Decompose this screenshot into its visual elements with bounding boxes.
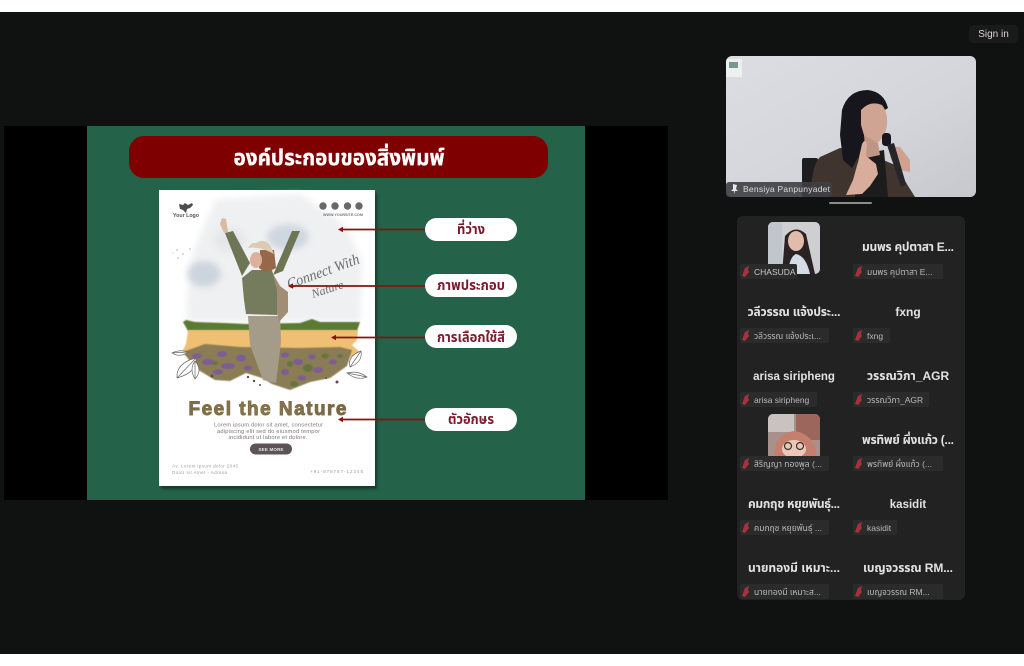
wall: [726, 56, 976, 197]
label: ที่ว่าง: [457, 219, 485, 237]
face: [861, 103, 888, 142]
participant: Manoporn: [853, 240, 954, 279]
label: [425, 408, 517, 431]
phone: +91-878787-12345: [310, 469, 363, 474]
participant: Manoporn: มนพร คุปตาสา E...: [862, 240, 954, 254]
poster example: [159, 190, 377, 489]
logo: [173, 203, 200, 219]
participant: kasidit: [853, 499, 926, 535]
hat: [248, 241, 274, 254]
hair: [840, 90, 888, 168]
participant: Pornthip: พรทิพย์ ผึ่งแก้ว (...: [862, 431, 954, 447]
raised hand: [846, 141, 878, 195]
participant: Nai Thongmee: นายทองมี เหมาะ...: [748, 561, 840, 575]
see more button: [250, 444, 292, 454]
poster headline: Feel the Nature: [188, 399, 346, 420]
social icons and website: [319, 202, 363, 217]
participant: Benyajawan: เบญจวรรณ RM...: [863, 561, 953, 575]
participant: kasidit: kasidit: [867, 523, 892, 533]
sign in button: Sign in: [978, 29, 1009, 40]
participant: Manoporn: มนพร คุปตาสา E...: [867, 267, 932, 277]
participant: fxng: [853, 305, 921, 343]
arrow: [331, 335, 426, 340]
participant: Nai Thongmee: [740, 561, 840, 599]
arrow: [338, 417, 426, 422]
participant: fxng: fxng: [895, 305, 921, 319]
participant: Wannipa AGR: วรรณวิภา_AGR: [867, 395, 923, 405]
participant: Khomkrit: [740, 497, 840, 535]
poster body text: adipiscing elit sed do eiusmod tempor: [217, 429, 320, 435]
participant: arisa siripheng: arisa siripheng: [753, 371, 835, 383]
script text: Connect With: [285, 252, 362, 293]
sky and clouds: [186, 194, 362, 322]
sign in button: [969, 25, 1018, 43]
label: [425, 274, 517, 297]
label: [425, 325, 517, 348]
neck: [864, 135, 880, 158]
sweater: [242, 270, 277, 315]
label: การเลือกใช้สี: [437, 329, 506, 345]
wheat field: [181, 330, 360, 360]
speaker name tag: Bensiya Panpunyadet: [743, 184, 831, 194]
slide title banner: [129, 136, 548, 178]
participant: CHASUDA: [740, 222, 820, 279]
poster body text: Lorem ipsum dolor sit amet, consectetur: [214, 422, 323, 428]
logo: Your Logo: [173, 213, 200, 219]
avatar: [768, 222, 820, 274]
participant: Benyajawan: เบญจวรรณ RM...: [867, 587, 930, 597]
social icons and website: WWW.YOURSITE.COM: [323, 213, 363, 217]
participant: arisa siripheng: [740, 371, 835, 407]
hand on microphone: [888, 146, 910, 172]
participant: Wannipa AGR: [853, 369, 949, 407]
label: ภาพประกอบ: [437, 277, 505, 293]
tree line: [183, 319, 360, 331]
address: Av. Lorem ipsum dolor 2045: [172, 464, 238, 468]
participant: Walaiwan: วลีวรรณ แจ้งประ...: [748, 305, 840, 319]
callout: colour choice: [331, 325, 517, 348]
poster body text: incididunt ut labore et dolore.: [228, 435, 308, 441]
arrow: [288, 283, 426, 289]
participant: Walaiwan: วลีวรรณ แจ้งประเ...: [754, 331, 821, 341]
thermostat: [726, 59, 742, 77]
participant: Khomkrit: คมกฤช หยุยพันธุ์...: [748, 497, 840, 511]
scroll handle: [829, 202, 872, 204]
shared slide area: [4, 126, 668, 500]
participant: Walaiwan: [740, 305, 840, 343]
poster sheet: [159, 190, 377, 489]
participant: Khomkrit: คมกฤช หยุยพันธุ์ ...: [754, 523, 822, 533]
participant: Siriyanya: สิริญญา ทองพูล (...: [754, 459, 822, 470]
see more button: SEE MORE: [258, 447, 284, 452]
participant: Siriyanya: [740, 414, 829, 471]
shirt: [855, 150, 888, 197]
arrow: [338, 227, 426, 232]
chair: [802, 158, 818, 197]
arms: [225, 231, 250, 276]
participant: Nai Thongmee: นายทองมี เหมาะส...: [754, 587, 821, 597]
microphone: [882, 133, 906, 187]
address: Dolor sit Amet - Adrasa: [172, 470, 227, 475]
woman with raised arms: [220, 218, 300, 383]
participant: Pornthip: พรทิพย์ ผึ่งแก้ว (...: [867, 458, 932, 469]
legs: [248, 316, 281, 383]
callout: illustration: [288, 274, 517, 297]
backpack: [272, 272, 288, 322]
participant: Pornthip: [853, 431, 954, 471]
participants panel: [737, 216, 965, 600]
speaker video: [726, 56, 976, 197]
label: ตัวอักษร: [448, 411, 494, 427]
leaf line art: [172, 351, 367, 379]
speaker figure: [810, 90, 915, 197]
jacket: [810, 148, 915, 197]
address: [172, 464, 238, 475]
hair: [259, 250, 276, 273]
torn edge dots: [210, 374, 338, 386]
participant: Benyajawan: [853, 561, 953, 599]
poster body text: [214, 422, 323, 441]
speaker name tag: [726, 182, 832, 197]
face: [250, 252, 262, 268]
bird specks: [172, 248, 191, 259]
callout: white space: [338, 218, 517, 241]
avatar: [768, 414, 820, 460]
participant: arisa siripheng: arisa siripheng: [754, 395, 810, 405]
slide title banner: องค์ประกอบของสิ่งพิมพ์: [234, 143, 445, 170]
name tag: CHASUDA: [754, 267, 796, 277]
script text second line: Nature: [309, 277, 346, 301]
participant: Wannipa AGR: วรรณวิภา_AGR: [867, 369, 949, 383]
participant: fxng: fxng: [867, 331, 883, 341]
participant: kasidit: kasidit: [890, 499, 926, 511]
label: [425, 218, 517, 241]
lavender field: [183, 344, 352, 390]
callout: typography: [338, 408, 517, 431]
